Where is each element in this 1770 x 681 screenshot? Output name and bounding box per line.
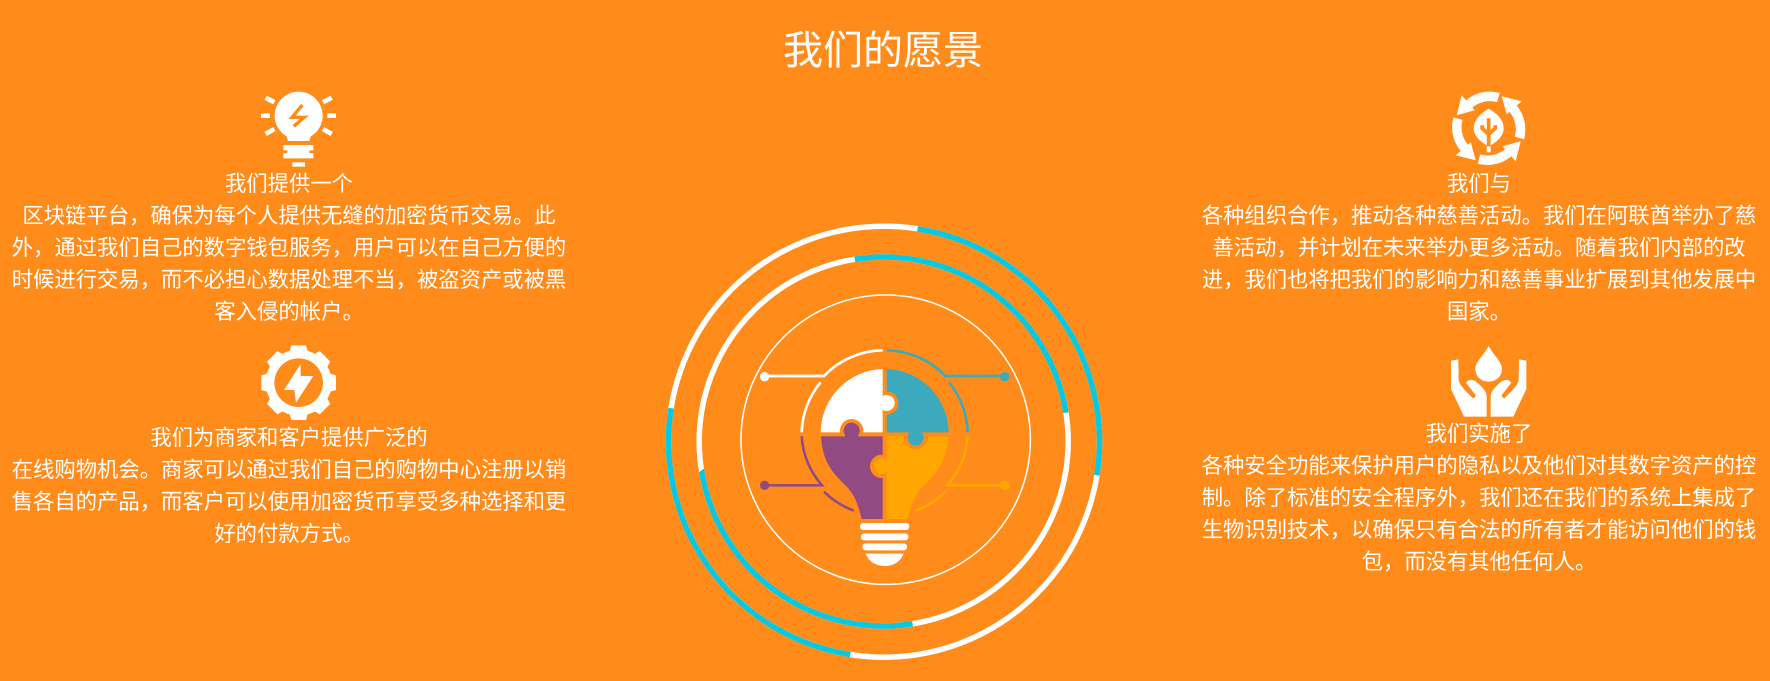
panel: security bbox=[1202, 346, 1756, 574]
text block: security: 各种安全功能来保护用户的隐私以及他们对其数字资产的控 bbox=[1202, 454, 1756, 478]
text block: security: 制。除了标准的安全程序外，我们还在我们的系统上集成了 bbox=[1202, 486, 1756, 510]
puzzle piece: white bbox=[821, 369, 883, 432]
text block: charity: 善活动，并计划在未来举办更多活动。随着我们内部的改 bbox=[1212, 236, 1746, 260]
text block: online shopping: 好的付款方式。 bbox=[214, 522, 364, 546]
title: 我们的愿景 bbox=[783, 29, 983, 73]
text block: online shopping: 售各自的产品，而客户可以使用加密货币享受多种选择和更 bbox=[12, 490, 566, 514]
puzzle piece: gold bbox=[887, 436, 948, 519]
white connector bbox=[765, 350, 883, 432]
text block: charity bbox=[1202, 172, 1756, 324]
text block: online shopping bbox=[12, 426, 566, 546]
outer ring bbox=[637, 195, 1131, 681]
knob cut-outs bbox=[840, 391, 927, 478]
panel: central light bulb graphic bbox=[666, 224, 1102, 660]
icon: hands holding a drop bbox=[1451, 346, 1526, 417]
text block: charity: 各种组织合作，推动各种慈善活动。我们在阿联酋举办了慈 bbox=[1202, 204, 1756, 228]
panel: blockchain platform bbox=[12, 92, 566, 324]
text block: blockchain platform bbox=[12, 172, 566, 324]
text block: online shopping: 我们为商家和客户提供广泛的 bbox=[150, 426, 428, 450]
teal connector bbox=[887, 350, 1005, 432]
puzzle light bulb bbox=[760, 350, 1009, 566]
text block: blockchain platform: 客入侵的帐户。 bbox=[214, 300, 364, 324]
panel: online shopping bbox=[12, 345, 566, 546]
text block: blockchain platform: 我们提供一个 bbox=[225, 172, 353, 196]
text block: charity: 我们与 bbox=[1447, 172, 1511, 196]
text block: security: 我们实施了 bbox=[1426, 422, 1532, 446]
text block: charity: 进，我们也将把我们的影响力和慈善事业扩展到其他发展中 bbox=[1202, 268, 1756, 292]
text block: blockchain platform: 时候进行交易，而不必担心数据处理不当，被盗资产或被黑 bbox=[12, 268, 566, 292]
text block: online shopping: 在线购物机会。商家可以通过我们自己的购物中心注册以销 bbox=[12, 458, 566, 482]
gold connector bbox=[916, 436, 1005, 511]
icon: recycling arrows with leaf bbox=[1452, 92, 1526, 165]
text block: charity: 国家。 bbox=[1447, 300, 1511, 324]
icon: light bulb with lightning bolt bbox=[261, 92, 336, 167]
text block: security: 生物识别技术，以确保只有合法的所有者才能访问他们的钱 bbox=[1202, 518, 1756, 542]
inner ring bbox=[741, 295, 1030, 584]
puzzle piece: purple bbox=[821, 436, 883, 519]
panel: charity bbox=[1202, 92, 1756, 324]
text block: security bbox=[1202, 422, 1756, 574]
text block: blockchain platform: 区块链平台，确保为每个人提供无缝的加密货币交易。此 bbox=[22, 204, 556, 228]
middle ring bbox=[673, 230, 1095, 653]
bulb screw base bbox=[860, 523, 909, 566]
puzzle knobs bbox=[879, 395, 895, 411]
text block: security: 包，而没有其他任何人。 bbox=[1362, 550, 1596, 574]
puzzle piece: teal bbox=[887, 369, 949, 432]
text block: blockchain platform: 外，通过我们自己的数字钱包服务，用户可以在自己方便的 bbox=[12, 236, 566, 260]
purple connector bbox=[765, 436, 854, 511]
icon: gear with lightning bolt bbox=[261, 345, 336, 420]
